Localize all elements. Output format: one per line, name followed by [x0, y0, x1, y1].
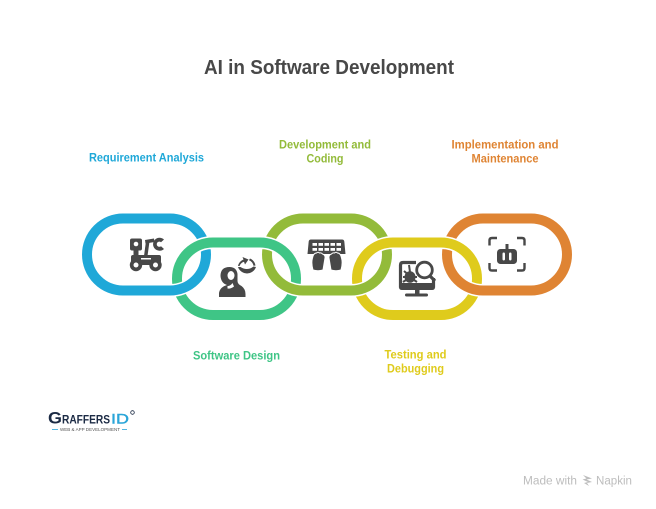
logo: GraffersID: RAFFERS [62, 414, 110, 426]
logo: GraffersID: ID [111, 410, 129, 426]
logo: GraffersID: WEB & APP DEVELOPMENT [60, 427, 120, 432]
label: Development and Coding: Development and [279, 138, 371, 152]
chain link: yellow [357, 242, 477, 315]
label: Development and Coding: Coding [306, 152, 344, 166]
lower overlaps of upper links [84, 268, 570, 297]
icon: robot rover with wrench [130, 238, 164, 271]
label: Testing and Debugging: Testing and [384, 348, 446, 362]
watermark: Made with Napkin: Made with [523, 476, 577, 488]
label: Testing and Debugging [384, 348, 446, 376]
infographic canvas [48, 59, 632, 487]
label: Testing and Debugging: Debugging [387, 362, 444, 376]
icon: monitor with bug and magnifier [399, 262, 435, 296]
chain link: green [177, 242, 296, 315]
icon: robot head in focus frame [490, 238, 524, 270]
chain link: orange [447, 218, 567, 290]
watermark: Made with Napkin: Napkin [596, 476, 632, 488]
label: Software Design: Software Design [193, 348, 280, 362]
chain link: olive [267, 218, 387, 290]
label: Implementation and Maintenance: Maintenance [472, 152, 539, 166]
chain link: blue [87, 218, 206, 290]
logo: GraffersID: G [48, 408, 62, 428]
logo: GraffersID [48, 408, 134, 432]
label: Implementation and Maintenance: Implementation and [452, 138, 558, 152]
icon: person with rotating arc [219, 257, 256, 297]
title: AI in Software Development [204, 57, 454, 79]
watermark: Made with Napkin [523, 475, 632, 488]
label: Development and Coding [279, 138, 371, 166]
label: Requirement Analysis: Requirement Analysis [89, 150, 204, 164]
label: Implementation and Maintenance [452, 138, 558, 166]
icon: hands on keyboard [308, 240, 346, 271]
